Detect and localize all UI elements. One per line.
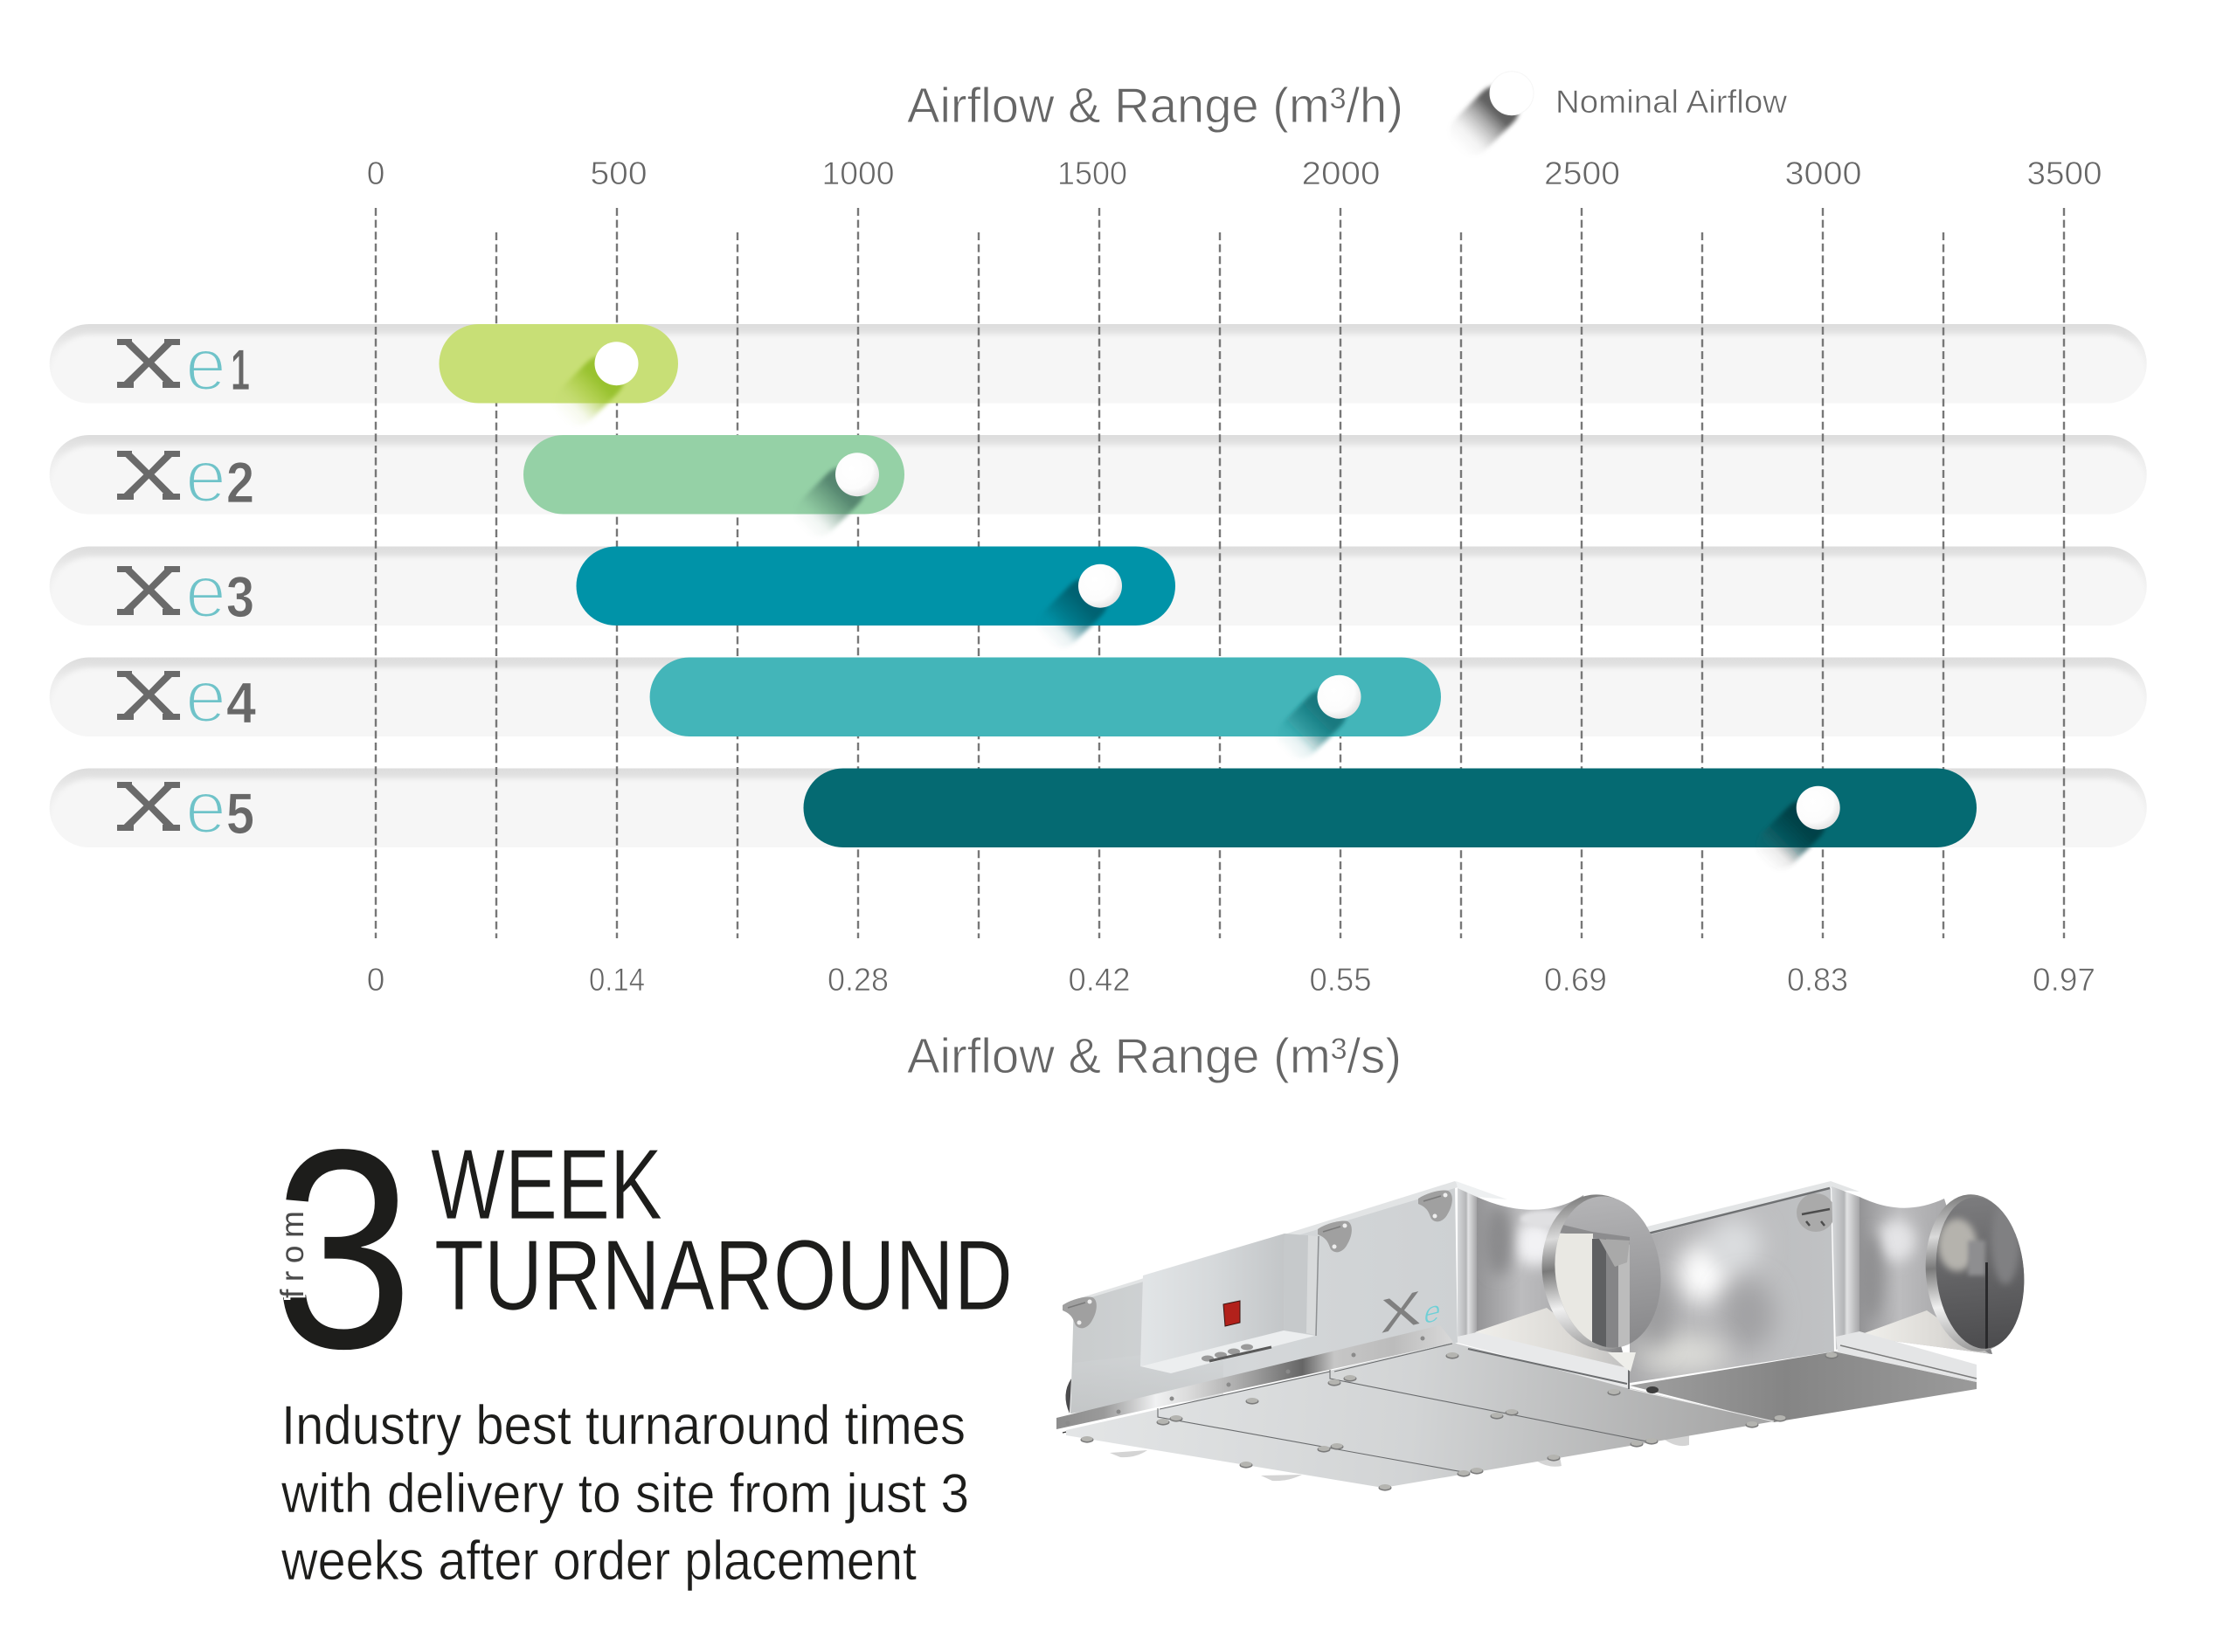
isolator switch	[1223, 1301, 1240, 1326]
model label Xe5: X	[115, 768, 182, 847]
WEEK: WEEK	[431, 1130, 662, 1241]
range bar Xe5	[804, 769, 1977, 878]
product illustration: twin air handling unit	[1056, 1181, 2031, 1491]
top axis labels m3/h: 1000	[821, 156, 895, 191]
bottom axis labels m3/s: 0.55	[1309, 962, 1372, 998]
gridlines	[376, 208, 2064, 938]
bottom axis labels m3/s: 0.83	[1787, 962, 1848, 998]
model label Xe2	[115, 435, 254, 517]
second unit spigot	[1832, 1186, 2031, 1382]
model label Xe5	[115, 766, 254, 848]
icon: legend knob with long shadow	[1442, 72, 1534, 163]
body copy	[280, 1395, 969, 1592]
unit logo: X	[1381, 1280, 1421, 1344]
rotated word from: from	[274, 1211, 310, 1298]
bottom axis title: Airflow & Range (m³/s)	[907, 1028, 1402, 1084]
door handles	[1063, 1190, 1452, 1328]
range bar Xe3	[577, 547, 1175, 656]
cable glands	[1202, 1344, 1253, 1361]
unit logo: e	[1422, 1292, 1444, 1331]
model label Xe4: X	[115, 657, 182, 736]
nominal marker Xe2	[787, 453, 879, 544]
second unit handle	[1797, 1193, 1835, 1232]
first unit underside panels	[1066, 1343, 1839, 1491]
model label Xe2: 2	[226, 450, 254, 515]
bottom axis labels m3/s: 0.14	[589, 962, 645, 998]
top axis labels m3/h: 3000	[1784, 156, 1861, 191]
top axis labels m3/h: 0	[367, 156, 384, 191]
model label Xe1: X	[115, 325, 182, 404]
dark latch	[1646, 1386, 1659, 1393]
second unit front panel	[1630, 1186, 1834, 1383]
bottom axis labels m3/s: 0.28	[828, 962, 889, 998]
model label Xe3: X	[115, 552, 182, 631]
side duct stub	[1065, 1379, 1071, 1414]
model label Xe5: 5	[226, 781, 254, 846]
top axis labels m3/h: 1500	[1057, 156, 1127, 191]
body copy: Industry best turnaround times	[281, 1395, 966, 1456]
model label Xe5: e	[185, 766, 226, 848]
second unit ring	[1919, 1190, 2031, 1356]
top axis title: Airflow & Range (m³/h)	[907, 78, 1403, 134]
panel fixings	[1080, 1352, 1839, 1491]
bottom axis labels m3/s	[367, 962, 2095, 998]
bottom axis labels m3/s: 0.97	[2033, 962, 2095, 998]
nominal marker Xe4	[1270, 675, 1361, 767]
range bar Xe1	[439, 324, 678, 433]
model label Xe4: 4	[226, 670, 256, 735]
model label Xe4: e	[185, 655, 226, 737]
TURNAROUND: TURNAROUND	[434, 1220, 1013, 1331]
ring	[1533, 1187, 1669, 1357]
top axis labels m3/h	[367, 156, 2102, 191]
lower funnel reflection	[1470, 1308, 1634, 1369]
range bar Xe4	[650, 657, 1441, 767]
legend label: Nominal Airflow	[1555, 84, 1787, 120]
body copy: weeks after order placement	[280, 1531, 917, 1592]
bottom axis labels m3/s: 0	[367, 962, 384, 998]
bottom axis labels m3/s: 0.69	[1544, 962, 1607, 998]
top axis labels m3/h: 2000	[1302, 156, 1381, 191]
model label Xe3: e	[185, 550, 226, 632]
lower flange	[1458, 1332, 1631, 1389]
unit logo	[1381, 1280, 1444, 1344]
model label Xe2: e	[185, 435, 226, 517]
control box	[1140, 1234, 1319, 1373]
headline: from 3 week turnaround	[274, 1091, 1013, 1408]
first unit spigot	[1456, 1181, 1670, 1389]
mounting feet	[1110, 1435, 1689, 1481]
second unit top strip	[1647, 1181, 1860, 1235]
top axis labels m3/h: 2500	[1544, 156, 1620, 191]
nominal marker Xe5	[1749, 786, 1840, 878]
range bar Xe2	[523, 435, 904, 544]
ring interior	[1551, 1223, 1630, 1350]
big numeral 3: 3	[274, 1091, 413, 1408]
nominal marker Xe3	[1030, 564, 1122, 656]
first unit side panel	[1070, 1185, 1458, 1414]
bottom axis labels m3/s: 0.42	[1068, 962, 1131, 998]
model label Xe3	[115, 550, 254, 632]
row tracks	[50, 324, 2147, 861]
body copy: with delivery to site from just 3	[280, 1463, 969, 1524]
model label Xe3: 3	[226, 564, 254, 629]
model label Xe4	[115, 655, 256, 737]
model label Xe1	[115, 323, 250, 405]
mounting rail	[1056, 1325, 1453, 1433]
model label Xe1: 1	[231, 337, 250, 402]
top axis labels m3/h: 3500	[2027, 156, 2102, 191]
top axis labels m3/h: 500	[591, 156, 647, 191]
legend: nominal airflow	[1442, 72, 1787, 163]
model label Xe1: e	[185, 323, 226, 405]
nominal marker Xe1	[547, 342, 638, 433]
second unit underside	[1630, 1351, 1977, 1422]
model label Xe2: X	[115, 437, 182, 515]
